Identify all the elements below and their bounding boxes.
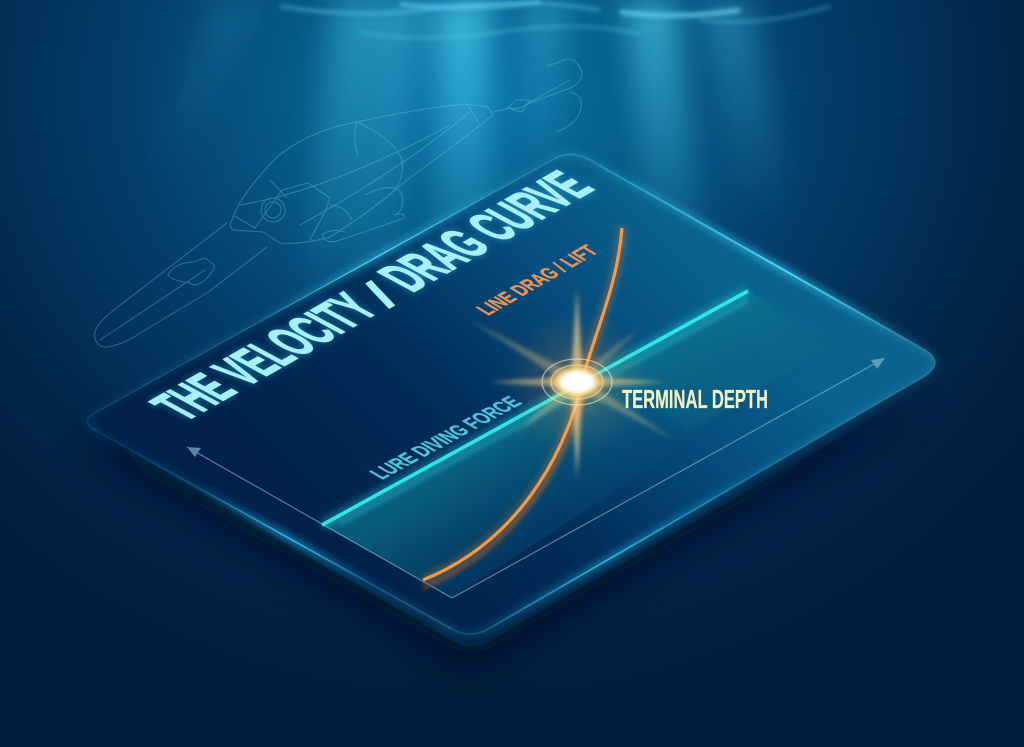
area under diving force line: [322, 291, 838, 598]
title text: [136, 163, 607, 428]
title text: DRAG CURVE: [363, 163, 607, 299]
lure line drawing: [95, 59, 582, 347]
intersection flare: [470, 288, 675, 478]
label: line drag / lift: LINE DRAG / LIFT: [471, 241, 604, 319]
panel edge glows: [88, 154, 935, 634]
title glow: DRAG CURVE: [363, 163, 607, 299]
label: lure diving force: LURE DIVING FORCE: [364, 393, 527, 483]
water surface ripples: [280, 2, 830, 38]
lure body: [230, 104, 493, 243]
panel thickness: [90, 360, 938, 646]
axes with arrows: [187, 358, 885, 598]
panel: tablet: [88, 154, 938, 646]
lure lip: [95, 223, 267, 347]
chart: [187, 228, 885, 598]
lure eye: [261, 198, 285, 222]
orange curve: line drag / lift: [423, 228, 622, 588]
panel face: [88, 154, 935, 634]
target rings: [542, 359, 612, 405]
lure gill plate: [233, 104, 478, 240]
panel shadow: [85, 400, 920, 660]
title text: THE VELOCITY: [136, 285, 393, 428]
title glow: THE VELOCITY: [136, 285, 393, 428]
belly hook: [322, 188, 405, 242]
star rays: [470, 288, 675, 478]
upper right area tint: [600, 291, 838, 432]
cyan line: lure diving force: [322, 291, 748, 525]
tail hook: [493, 59, 582, 132]
label: terminal depth: TERMINAL DEPTH: [622, 384, 768, 414]
light rays: [150, 0, 790, 310]
title text: /: [353, 276, 409, 314]
title glow: [136, 163, 607, 428]
